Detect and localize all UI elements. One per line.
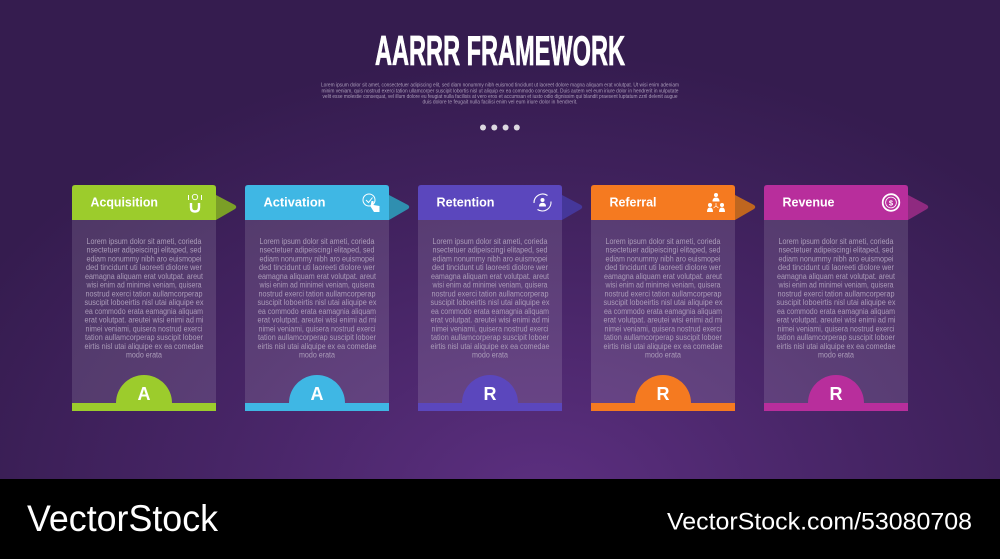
description: erat volutpat. areutei wisi enimi ad mi [84, 316, 204, 325]
icon: check and hand [363, 194, 380, 212]
badge letter: A [138, 384, 150, 404]
header [418, 185, 562, 220]
description: eirtis nisl utai aliquipe ex ea comedae [258, 342, 376, 351]
description [258, 237, 377, 360]
icon: dollar coin [883, 194, 899, 211]
description: ea commodo erata eamagnia aliquam [604, 307, 722, 316]
description: tation aullamcorperap suscipit loboer [85, 333, 203, 342]
bottom bar and semicircle badge [418, 375, 562, 411]
description: ea commodo erata eamagnia aliquam [258, 307, 376, 316]
header [245, 185, 389, 220]
description: nimei veniami, quisera nostrud exerci [258, 324, 376, 333]
description: eirtis nisl utai aliquipe ex ea comedae [84, 342, 204, 351]
description: wisi enim ad minimei veniam, quisera [778, 281, 894, 290]
description: Lorem ipsum dolor sit ameti, corieda [86, 237, 202, 246]
description: suscipit loboeirtis nisl utai aliquipe ex [430, 298, 550, 307]
description: tation aullamcorperap suscipit loboer [777, 333, 895, 342]
badge letter: R [656, 384, 670, 404]
description: Lorem ipsum dolor sit ameti, corieda [260, 237, 375, 246]
description: nostrud exerci tation aullamcorperap [604, 289, 722, 298]
description [430, 237, 550, 360]
card body [764, 220, 908, 411]
bottom bar and semicircle badge [591, 375, 735, 411]
description: suscipit loboeirtis nisl utai aliquipe ex [776, 298, 896, 307]
description: ea commodo erata eamagnia aliquam [85, 307, 203, 316]
description: eamagna aliquam erat volutpat. areut [258, 272, 377, 281]
intro paragraph: velit esse molestie consequat, vel illum dolore eu feugiat nulla facilisis at vero eros et accumsan et iusto odio dignissim qui blandit praesent luptatum zzril delenit augue [322, 94, 678, 100]
arrow [908, 195, 928, 220]
bottom bar and semicircle badge [72, 375, 216, 411]
icon: referral network [707, 193, 725, 212]
description: nimei veniami, quisera nostrud exerci [86, 324, 203, 333]
description: erat volutpat. areutei wisi enimi ad mi [776, 316, 896, 325]
description: ded tincidunt uti laoreeti diolore wer [259, 263, 375, 272]
footer image url: VectorStock.com/53080708 [667, 508, 972, 536]
panel: referral [591, 185, 755, 411]
description: ediam nonummy nibh aro euismopei [260, 254, 375, 264]
badge letter: R [830, 384, 842, 404]
description: Lorem ipsum dolor sit ameti, corieda [606, 237, 721, 246]
heading: Referral [610, 196, 656, 210]
intro paragraph: duis dolore te feugait nulla facilisi enim vel eum iriure dolor in hendrerit. [422, 100, 578, 106]
panel: activation [245, 185, 409, 411]
description: eamagna aliquam erat volutpat. areut [604, 272, 723, 281]
panel: acquisition [72, 185, 236, 411]
intro paragraph: minim veniam, quis nostrud exerci tation ullamcorper suscipit lobortis nisl ut aliquip ex ea commodo consequat. Duis autem vel eum iriure dolor in hendrerit in vulputate [322, 88, 679, 94]
description: nsectetuer adipeiscingi elitaped, sed [606, 246, 720, 255]
header [591, 185, 735, 220]
description: tation aullamcorperap suscipit loboer [431, 333, 549, 342]
description: ea commodo erata eamagnia aliquam [431, 307, 549, 316]
description: modo erata [645, 350, 682, 360]
description: eirtis nisl utai aliquipe ex ea comedae [604, 342, 722, 351]
description: nostrud exerci tation aullamcorperap [778, 289, 895, 298]
card body [245, 220, 389, 411]
description: ded tincidunt uti laoreeti diolore wer [86, 263, 202, 272]
description: modo erata [126, 350, 163, 360]
description: erat volutpat. areutei wisi enimi ad mi [604, 316, 723, 325]
description [776, 237, 896, 360]
bottom bar and semicircle badge [764, 375, 908, 411]
description: suscipit loboeirtis nisl utai aliquipe ex [258, 298, 377, 307]
pagination dots [480, 124, 520, 130]
description: nostrud exerci tation aullamcorperap [432, 289, 549, 298]
description: nimei veniami, quisera nostrud exerci [778, 324, 895, 333]
description: eamagna aliquam erat volutpat. areut [431, 272, 550, 281]
header [72, 185, 216, 220]
description: ded tincidunt uti laoreeti diolore wer [605, 263, 721, 272]
footer logo: VectorStock [27, 498, 218, 539]
description: Lorem ipsum dolor sit ameti, corieda [778, 237, 894, 246]
description: nsectetuer adipeiscingi elitaped, sed [432, 246, 548, 255]
description: nostrud exerci tation aullamcorperap [86, 289, 203, 298]
arrow [562, 195, 582, 220]
description: nsectetuer adipeiscingi elitaped, sed [260, 246, 374, 255]
title: AARRR FRAMEWORK [375, 27, 625, 74]
description: Lorem ipsum dolor sit ameti, corieda [432, 237, 548, 246]
intro paragraph: Lorem ipsum dolor sit amet, consectetuer adipiscing elit, sed diam nonummy nibh euismod tincidunt ut laoreet dolore magna aliquam erat volutpat. Ut wisi enim adeniam [321, 82, 680, 88]
description [84, 237, 204, 360]
description: eamagna aliquam erat volutpat. areut [85, 272, 204, 281]
icon: magnet [188, 194, 202, 212]
arrow [735, 195, 755, 220]
intro paragraph [321, 82, 680, 106]
card body [418, 220, 562, 411]
description: suscipit loboeirtis nisl utai aliquipe ex [604, 298, 723, 307]
description: ded tincidunt uti laoreeti diolore wer [778, 263, 894, 272]
badge letter: A [310, 384, 324, 404]
heading: Revenue [782, 196, 835, 210]
description: suscipit loboeirtis nisl utai aliquipe ex [84, 298, 204, 307]
description: modo erata [818, 350, 855, 360]
description: nimei veniami, quisera nostrud exerci [432, 324, 549, 333]
description: ded tincidunt uti laoreeti diolore wer [432, 263, 548, 272]
description: wisi enim ad minimei veniam, quisera [86, 281, 202, 290]
card body [72, 220, 216, 411]
panel: retention [418, 185, 582, 411]
description: ediam nonummy nibh aro euismopei [432, 254, 548, 264]
description: tation aullamcorperap suscipit loboer [258, 333, 376, 342]
icon: dollar coin: $ [889, 198, 894, 207]
description: ediam nonummy nibh aro euismopei [606, 254, 721, 264]
heading: Activation [264, 196, 326, 210]
heading: Retention [436, 196, 494, 210]
bottom bar and semicircle badge [245, 375, 389, 411]
description: tation aullamcorperap suscipit loboer [604, 333, 722, 342]
description: erat volutpat. areutei wisi enimi ad mi [430, 316, 550, 325]
description: nsectetuer adipeiscingi elitaped, sed [778, 246, 894, 255]
badge letter: R [484, 384, 496, 404]
description: ediam nonummy nibh aro euismopei [86, 254, 202, 264]
description: wisi enim ad minimei veniam, quisera [432, 281, 548, 290]
description: modo erata [472, 350, 509, 360]
panel: revenue [764, 185, 928, 411]
header [764, 185, 908, 220]
description: ea commodo erata eamagnia aliquam [777, 307, 895, 316]
description: ediam nonummy nibh aro euismopei [778, 254, 894, 264]
description: wisi enim ad minimei veniam, quisera [259, 281, 375, 290]
description [604, 237, 723, 360]
description: eirtis nisl utai aliquipe ex ea comedae [776, 342, 896, 351]
heading: Acquisition [90, 196, 158, 210]
description: eamagna aliquam erat volutpat. areut [777, 272, 896, 281]
footer band [0, 479, 1000, 559]
description: eirtis nisl utai aliquipe ex ea comedae [430, 342, 550, 351]
description: nimei veniami, quisera nostrud exerci [604, 324, 722, 333]
card body [591, 220, 735, 411]
arrow [216, 195, 236, 220]
description: wisi enim ad minimei veniam, quisera [605, 281, 721, 290]
description: erat volutpat. areutei wisi enimi ad mi [258, 316, 377, 325]
description: nostrud exerci tation aullamcorperap [258, 289, 376, 298]
arrow [389, 195, 409, 220]
description: nsectetuer adipeiscingi elitaped, sed [86, 246, 202, 255]
icon: retention cycle [534, 194, 551, 211]
description: modo erata [299, 350, 336, 360]
